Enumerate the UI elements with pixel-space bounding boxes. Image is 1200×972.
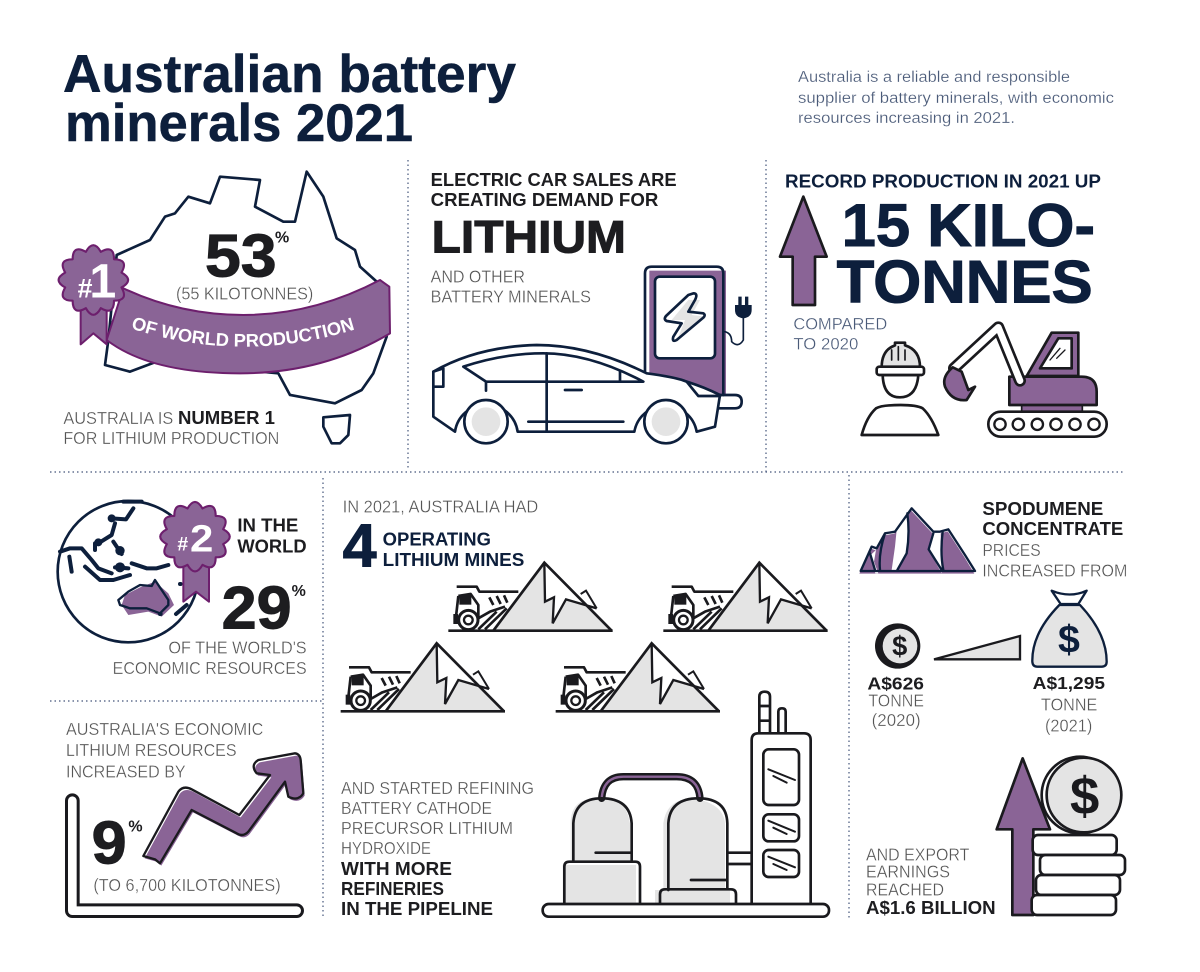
text: refining: PRECURSOR LITHIUM [341, 818, 513, 838]
heading: spodumene concentrate [982, 498, 1127, 581]
label: A$1,295 2021: TONNE [1041, 695, 1097, 715]
panel: record production [780, 170, 1107, 437]
percentage 9: 9 [92, 809, 127, 876]
icon: mine 1 [448, 563, 613, 631]
icon: mountains [859, 508, 975, 574]
text: refining: REFINERIES [341, 879, 444, 899]
icon: mine 4 [556, 643, 720, 711]
title [63, 45, 517, 153]
caption: export earnings: AND EXPORT [866, 845, 970, 865]
banner: of world production [108, 279, 391, 374]
title: minerals 2021 [65, 94, 413, 153]
caption: resources increased: INCREASED BY [66, 761, 186, 781]
wedge: price rise [934, 636, 1020, 659]
icon: money bag: $ [1058, 618, 1080, 662]
intro text [798, 69, 1114, 127]
heading: lithium: LITHIUM [432, 212, 626, 263]
caption: economic resources [113, 637, 307, 678]
caption: number 1: AUSTRALIA IS [63, 408, 173, 428]
caption: economic resources: ECONOMIC RESOURCES [113, 658, 307, 678]
caption: resources increased [66, 719, 263, 781]
caption: compared to 2020: COMPARED [793, 314, 887, 333]
label: A$1,295 2021 [1033, 673, 1105, 736]
icon: coin stack: $ [1070, 767, 1099, 826]
text: refining: WITH MORE [341, 859, 452, 879]
intro text: supplier of battery minerals, with economic [798, 90, 1114, 107]
label: A$1,295 2021: (2021) [1045, 716, 1092, 736]
icon: electric car [433, 345, 742, 443]
percentage 29: 29 [222, 574, 292, 641]
caption: export earnings: EARNINGS [866, 862, 950, 882]
icon: coin [875, 623, 920, 669]
percentage 9 [92, 809, 143, 876]
caption: other battery minerals: AND OTHER [431, 267, 525, 287]
heading: record production: RECORD PRODUCTION IN 2021 UP [785, 170, 1101, 191]
icon: refinery [543, 692, 829, 917]
icon: coin stack [1032, 757, 1125, 915]
caption: compared to 2020 [793, 314, 887, 353]
caption: other battery minerals [431, 267, 591, 307]
icon: mine 2 [663, 563, 828, 631]
panel: export earnings [866, 757, 1125, 918]
kilotonnes note: (55 KILOTONNES) [176, 283, 313, 303]
caption: resources increased: AUSTRALIA'S ECONOMIC [66, 719, 263, 739]
intro text: resources increasing in 2021. [798, 110, 1015, 127]
icon: charging station [645, 267, 752, 395]
badge: number 2 [160, 502, 230, 602]
intro text: Australia is a reliable and responsible [798, 69, 1070, 86]
text: refining: BATTERY CATHODE [341, 798, 492, 818]
panel: spodumene prices [859, 498, 1127, 736]
chart axes [72, 801, 297, 911]
panel: resources increased [66, 719, 305, 911]
icon: coin: $ [892, 631, 907, 662]
map of Australia [105, 172, 387, 443]
panel: number 2 resources [58, 501, 307, 678]
caption: other battery minerals: BATTERY MINERALS [431, 287, 591, 307]
caption: number 1: FOR LITHIUM PRODUCTION [63, 428, 279, 448]
badge: number 2: 2 [190, 517, 213, 560]
text: refining: HYDROXIDE [341, 838, 431, 858]
icon: mine 3 [341, 643, 505, 711]
panel: number 1 lithium production [58, 170, 391, 448]
banner: of world production: OF WORLD PRODUCTION [132, 318, 354, 347]
badge: number 2: # [177, 535, 188, 556]
icon: money bag [1032, 591, 1107, 667]
heading: in the world: IN THE [237, 515, 298, 536]
title: Australian battery [63, 45, 517, 104]
caption: in 2021: IN 2021, AUSTRALIA HAD [343, 497, 538, 517]
figure: 15 kilotonnes [837, 192, 1095, 316]
text: refining [341, 778, 534, 919]
text: refining: IN THE PIPELINE [341, 899, 493, 919]
heading: electric car sales: CREATING DEMAND FOR [431, 189, 659, 210]
text: refining: AND STARTED REFINING [341, 778, 534, 798]
icon: worker [862, 343, 938, 435]
panel: electric cars [431, 169, 752, 443]
heading: spodumene concentrate: SPODUMENE [982, 498, 1103, 519]
heading: spodumene concentrate: CONCENTRATE [982, 518, 1123, 539]
caption: export earnings: REACHED [866, 880, 944, 900]
badge: number 1: 1 [89, 254, 116, 308]
label: A$626 2020: (2020) [872, 710, 921, 730]
percentage 53: 53 [205, 223, 277, 290]
heading: operating lithium mines: LITHIUM MINES [383, 549, 524, 570]
label: A$1,295 2021: A$1,295 [1033, 673, 1105, 693]
heading: operating lithium mines: OPERATING [383, 529, 491, 550]
badge: number 1: # [78, 273, 93, 303]
heading: spodumene concentrate: PRICES [982, 540, 1041, 560]
caption: economic resources: OF THE WORLD'S [168, 637, 307, 657]
label: A$626 2020: A$626 [867, 673, 924, 693]
figure: 15 kilotonnes: 15 KILO- [842, 192, 1095, 259]
badge: number 1 [59, 245, 128, 344]
percentage 9: % [128, 819, 143, 836]
arrow: up [780, 197, 827, 305]
percentage 29: % [292, 583, 306, 600]
panel: lithium mines [341, 497, 828, 711]
icon: excavator [944, 327, 1107, 437]
caption: resources increased: LITHIUM RESOURCES [66, 740, 237, 760]
percentage 53: % [275, 230, 289, 247]
heading: electric car sales [431, 169, 677, 210]
heading: in the world: WORLD [237, 535, 307, 556]
caption: export earnings: A$1.6 BILLION [866, 897, 996, 918]
label: A$626 2020: TONNE [868, 691, 924, 711]
heading: spodumene concentrate: INCREASED FROM [982, 561, 1127, 581]
caption: number 1: NUMBER 1 [178, 407, 275, 428]
caption: 6,700 kilotonnes: (TO 6,700 KILOTONNES) [93, 875, 281, 895]
heading: operating lithium mines [383, 529, 524, 570]
label: A$626 2020 [867, 673, 924, 730]
figure: 4 mines: 4 [343, 512, 377, 581]
figure: 15 kilotonnes: TONNES [837, 249, 1093, 316]
arrow: earnings up [997, 758, 1050, 915]
caption: number 1 [63, 407, 279, 448]
arrow: rising trend [143, 753, 305, 866]
heading: electric car sales: ELECTRIC CAR SALES ARE [431, 169, 677, 190]
caption: compared to 2020: TO 2020 [793, 334, 858, 353]
caption: export earnings [866, 845, 996, 918]
icon: globe [58, 501, 199, 642]
heading: in the world [237, 515, 307, 556]
